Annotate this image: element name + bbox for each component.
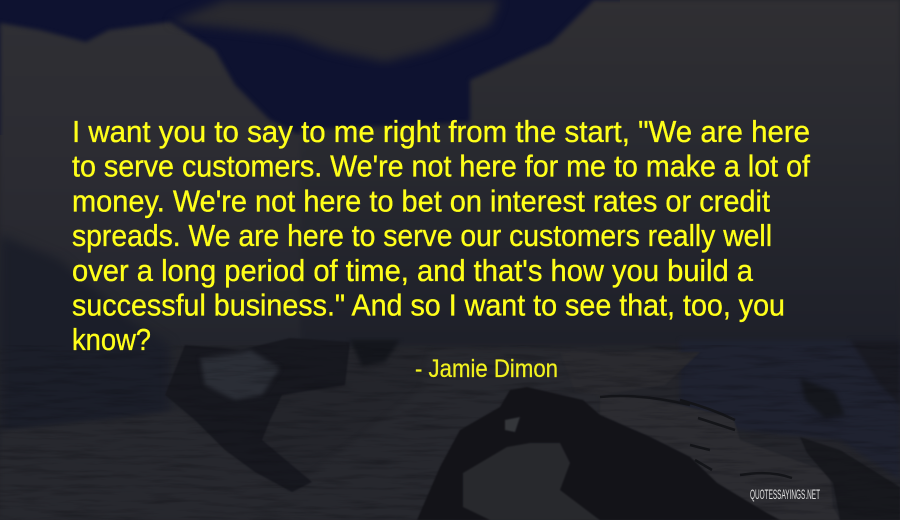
quote line 3: money. We're not here to bet on interest rates or credit bbox=[72, 183, 770, 218]
lower snowfields bbox=[0, 350, 600, 520]
quote line 5: over a long period of time, and that's how you build a bbox=[72, 253, 754, 288]
right rocks bbox=[800, 437, 900, 520]
infographic: QUOTESSAYINGS.NET bbox=[750, 486, 820, 502]
attribution: - Jamie Dimon bbox=[415, 355, 558, 383]
grey-blue patch bbox=[200, 350, 280, 400]
quote line 4: spreads. We are here to serve our customers really well bbox=[72, 218, 772, 253]
quote line 2: to serve customers. We're not here for me to make a lot of bbox=[72, 149, 810, 184]
cloud centre bbox=[170, 0, 500, 62]
dark blue slope left bbox=[0, 235, 170, 450]
night sky bbox=[0, 0, 620, 135]
crevasses bbox=[600, 396, 792, 478]
quote line 6: successful business." And so I want to see that, too, you bbox=[72, 288, 785, 322]
central dark peak bbox=[417, 387, 780, 520]
cloud right bbox=[300, 0, 900, 345]
right navy slope bbox=[680, 340, 900, 480]
snow band upper right bbox=[560, 352, 700, 395]
glacier right bbox=[600, 395, 840, 520]
streaked ice texture bbox=[0, 345, 900, 520]
dark cloud patches bbox=[350, 340, 400, 366]
quote text bbox=[72, 114, 810, 357]
quote line 7: know? bbox=[72, 322, 151, 357]
quote line 1: I want you to say to me right from the start, "We are here bbox=[72, 114, 810, 149]
cloud left bbox=[0, 22, 340, 345]
inner snow patch bbox=[463, 443, 600, 520]
rock face left bbox=[165, 338, 350, 492]
